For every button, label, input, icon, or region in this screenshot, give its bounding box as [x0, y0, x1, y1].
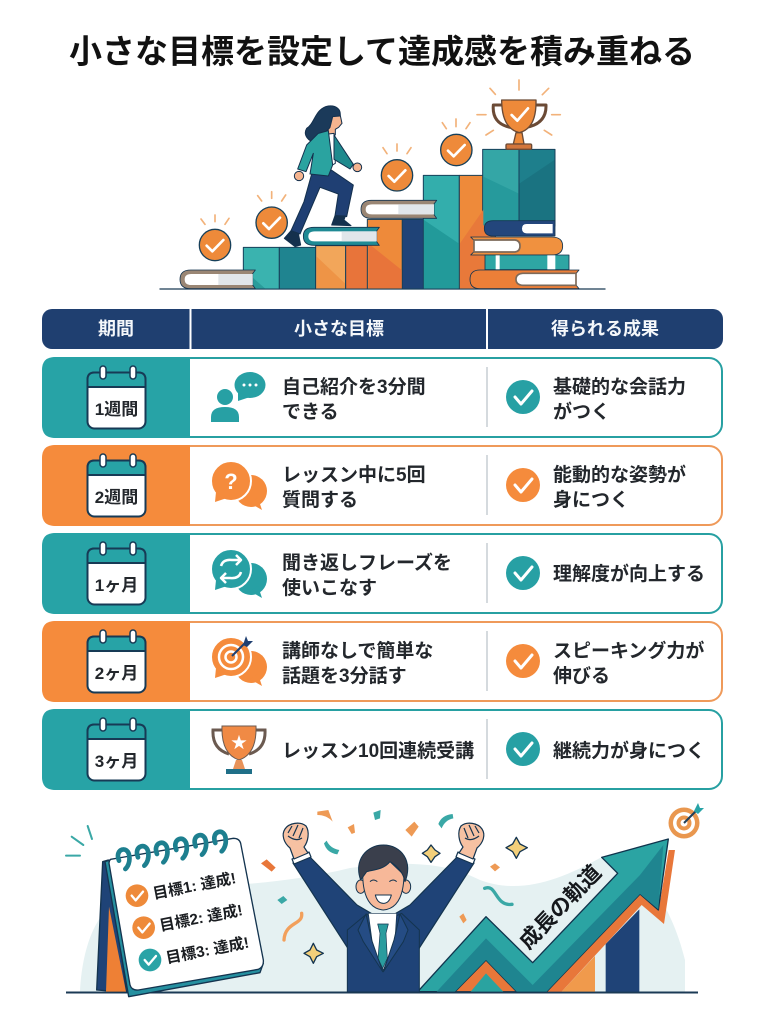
result text: 伸びる — [553, 665, 610, 687]
table header — [42, 309, 723, 349]
hair — [359, 845, 408, 882]
icon: question bubbles: ? — [224, 469, 238, 494]
orange check badges — [199, 134, 472, 261]
calendar notepad — [66, 826, 263, 997]
ground line — [160, 287, 605, 291]
calendar: 2ヶ月 — [88, 630, 146, 692]
sparkle rays — [201, 80, 560, 224]
trophy — [493, 100, 546, 149]
row: 2 weeks — [42, 445, 722, 526]
page edge — [105, 860, 263, 997]
checklist item 3: 目標3: 達成! — [164, 934, 251, 967]
right arm and fist — [393, 823, 484, 965]
goal text: 話題を3分話す — [282, 665, 407, 687]
icon: trophy: ★ — [231, 735, 247, 752]
checklist item 3 — [139, 934, 251, 971]
background blob — [80, 858, 685, 992]
checklist item 1: 目標1: 達成! — [151, 869, 238, 903]
teal rays — [66, 826, 92, 856]
row: 1 week — [42, 357, 722, 438]
woman climbing — [284, 106, 362, 247]
calendar: 1ヶ月: 1ヶ月 — [95, 576, 138, 595]
table header: 得られる成果 — [551, 318, 659, 339]
calendar: 2ヶ月: 2ヶ月 — [95, 664, 138, 683]
page — [109, 838, 263, 990]
icon: check — [506, 732, 540, 766]
block shading — [244, 160, 554, 288]
ground line — [66, 992, 698, 994]
navy and orange bars — [562, 909, 639, 992]
result text: 基礎的な会話力 — [553, 377, 686, 398]
step book 2 — [303, 227, 379, 245]
tie — [378, 924, 388, 968]
checklist item 2: 目標2: 達成! — [158, 901, 244, 935]
checklist item 2 — [132, 901, 244, 939]
goal text: レッスン10回連続受講 — [282, 739, 474, 762]
icon: question bubbles — [211, 461, 267, 510]
check marks — [207, 145, 465, 251]
row: 1 month — [42, 533, 722, 614]
icon: check — [506, 644, 540, 678]
smile — [370, 880, 397, 903]
confetti and sparkles — [261, 810, 381, 963]
goal text: できる — [282, 401, 339, 423]
shirt — [368, 913, 397, 970]
calendar: 3ヶ月 — [88, 718, 146, 780]
head — [356, 880, 365, 893]
table header: 小さな目標 — [294, 319, 384, 339]
growth arrow — [418, 839, 675, 992]
books — [180, 200, 579, 289]
icon: repeat bubbles — [211, 549, 267, 598]
calendar: 1週間: 1週間 — [95, 400, 138, 419]
icon: check — [506, 556, 540, 590]
celebrating man — [283, 823, 484, 992]
calendar: 1週間 — [88, 366, 146, 428]
row: 2 months — [42, 621, 722, 702]
label: 成長の軌道 — [515, 860, 606, 954]
calendar: 2週間 — [88, 454, 146, 516]
calendar: 2週間: 2週間 — [95, 488, 138, 507]
step book 3 — [361, 200, 437, 218]
stack: teal book — [485, 255, 569, 270]
icon: target bubbles — [211, 636, 267, 686]
stack: bottom book — [470, 270, 579, 289]
icon: trophy — [213, 726, 265, 774]
result text: スピーキング力が — [553, 641, 704, 662]
table — [42, 309, 723, 790]
table header: 期間 — [98, 319, 134, 339]
checklist item 1 — [126, 869, 238, 907]
goal text: 質問する — [282, 489, 358, 511]
calendar: 1ヶ月 — [88, 542, 146, 604]
torso and head — [347, 845, 419, 992]
title: 小さな目標を設定して達成感を積み重ねる — [69, 33, 695, 70]
stack: orange book — [471, 237, 563, 255]
result text: 理解度が向上する — [553, 562, 705, 585]
orange arrow shadow — [547, 850, 675, 992]
goal text: 使いこなす — [282, 577, 377, 599]
goal text: 聞き返しフレーズを — [282, 553, 452, 574]
row: 3 months — [42, 709, 722, 790]
calendar: 3ヶ月: 3ヶ月 — [95, 752, 138, 771]
icon: person speaking — [211, 372, 266, 422]
step book 1 — [180, 270, 255, 289]
goal text: 講師なしで簡単な — [282, 641, 433, 662]
teal arrow — [418, 839, 668, 992]
goal text: レッスン中に5回 — [282, 465, 426, 486]
result text: 継続力が身につく — [553, 739, 705, 762]
result text: 能動的な姿勢が — [553, 465, 686, 486]
suit body — [347, 913, 419, 992]
left arm and fist — [283, 823, 374, 965]
icon: target — [668, 803, 704, 838]
lapels — [358, 914, 408, 972]
small peak — [455, 960, 517, 992]
goal text: 自己紹介を3分間 — [282, 377, 426, 398]
result text: がつく — [553, 400, 610, 423]
result text: 身につく — [553, 489, 629, 511]
stack: navy book — [484, 221, 555, 236]
icon: check — [506, 468, 540, 502]
stair blocks — [243, 149, 555, 289]
icon: check — [506, 380, 540, 414]
illustration: woman climbing book stairs to a trophy — [160, 80, 605, 289]
notepad stand — [97, 860, 127, 992]
spiral rings — [118, 832, 226, 869]
